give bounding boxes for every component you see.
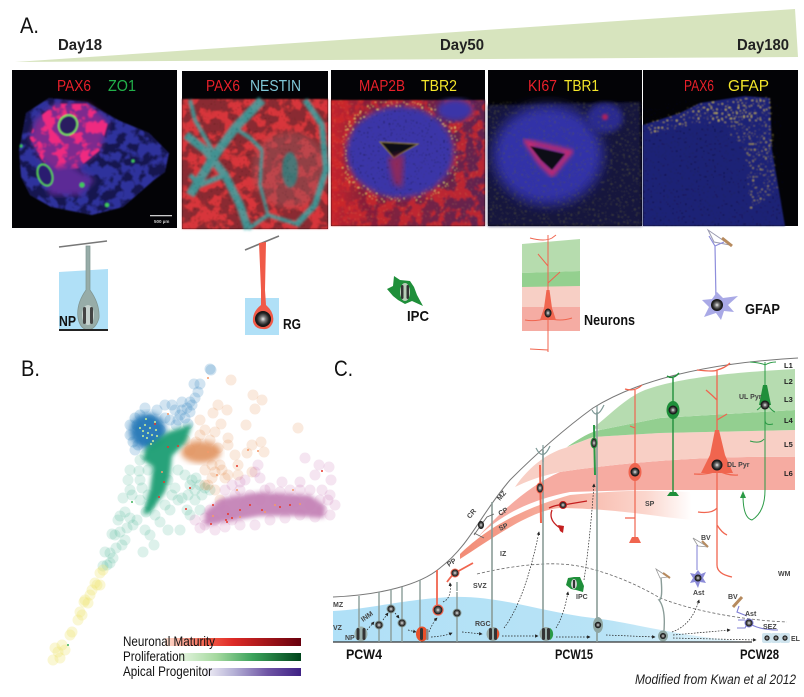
yellow cluster xyxy=(48,564,108,666)
label PCW4: PCW4 xyxy=(346,646,382,662)
label RG: RG xyxy=(283,316,301,333)
zone labels: VZ xyxy=(333,625,343,632)
micrograph: PAX6 NESTIN xyxy=(182,71,328,229)
zone labels: PP xyxy=(446,557,458,569)
zone labels: UL Pyr xyxy=(739,394,762,401)
legend label: neuronal maturity: Neuronal Maturity xyxy=(123,633,215,649)
label NP: NP xyxy=(59,313,76,330)
stain labels xyxy=(528,78,599,95)
zone labels: MZ xyxy=(496,489,508,502)
cell: neuroepithelial progenitors xyxy=(354,605,461,642)
micrograph: PAX6 GFAP xyxy=(643,70,798,226)
cell: deep layer pyramidal xyxy=(694,363,738,577)
zone labels: SP xyxy=(498,522,510,533)
legend bar: neuronal maturity xyxy=(165,638,301,646)
heading C: C. xyxy=(334,356,353,381)
cell: dividing red progenitor xyxy=(416,626,428,642)
layer labels xyxy=(784,361,794,478)
green core xyxy=(143,424,192,514)
panel B: cell scatter plot xyxy=(21,356,340,679)
layer labels: L4 xyxy=(784,416,794,425)
cell: migrating green neuron xyxy=(591,425,597,475)
marker dots: neuronal maturity xyxy=(154,423,323,525)
layer labels: L5 xyxy=(784,440,793,449)
purple cluster xyxy=(190,452,340,536)
stain labels: GFAP xyxy=(728,78,769,95)
orange core xyxy=(181,441,221,463)
zone labels: WM xyxy=(778,571,791,578)
cell: early neuron xyxy=(433,570,443,615)
cell type: GFAP astrocyte xyxy=(702,230,780,320)
stain labels: PAX6 xyxy=(684,78,714,95)
label PCW28: PCW28 xyxy=(740,646,779,662)
cell: red pyramidal 1 xyxy=(625,385,642,543)
zone labels: SEZ xyxy=(763,624,777,631)
zone labels: Ast xyxy=(745,611,757,618)
layer labels: L6 xyxy=(784,469,793,478)
label GFAP: GFAP xyxy=(745,301,780,318)
zone labels xyxy=(333,394,801,643)
L4 band xyxy=(567,410,795,447)
zone labels: DL Pyr xyxy=(727,462,750,469)
cell: radial glia dividing xyxy=(486,617,668,642)
zone labels: MZ xyxy=(333,602,344,609)
stain labels xyxy=(206,78,301,95)
zone labels: RGC xyxy=(475,621,491,628)
zone labels: BV xyxy=(701,535,711,542)
cell type: NP xyxy=(59,241,108,330)
zone labels: BV xyxy=(728,594,738,601)
zone labels: CR xyxy=(466,508,478,520)
panel C: cortical development schematic xyxy=(333,356,801,687)
micrograph: MAP2B TBR2 xyxy=(331,70,485,226)
cell type: Neurons xyxy=(522,235,635,352)
zone labels: SP xyxy=(645,501,655,508)
L5 band xyxy=(515,430,795,487)
label PCW15: PCW15 xyxy=(555,646,593,662)
cell: astrocyte with blood vessel xyxy=(690,538,708,588)
stain labels xyxy=(359,78,457,95)
zone labels: SVZ xyxy=(473,583,487,590)
stain labels xyxy=(57,78,136,95)
cell: preplate neuron xyxy=(447,563,473,582)
stain labels: KI67 xyxy=(528,78,557,95)
cell: migrating glia with vessel xyxy=(656,569,670,578)
heading A: A. xyxy=(20,13,39,38)
legend label: apical progenitor: Apical Progenitor xyxy=(123,663,212,679)
cell type: IPC xyxy=(387,276,429,325)
glia end-feet xyxy=(536,405,604,462)
label Neurons: Neurons xyxy=(584,312,635,329)
panel A: organoid timeline xyxy=(12,9,798,352)
L2-L3 band xyxy=(593,369,795,430)
zone labels: Ast xyxy=(693,590,705,597)
zone labels: INM xyxy=(360,610,375,624)
cell: subplate red neuron xyxy=(549,501,587,533)
stain labels: PAX6 xyxy=(206,78,240,95)
label IPC: IPC xyxy=(407,308,429,325)
ependymal cells xyxy=(762,633,790,643)
label Day180: Day180 xyxy=(737,37,789,54)
cell: green pyramidal xyxy=(666,373,680,496)
layer bands xyxy=(460,369,795,559)
stain labels: TBR2 xyxy=(421,78,457,95)
ventricular zone xyxy=(333,597,752,642)
pial surface xyxy=(333,358,798,597)
zone labels: NP xyxy=(345,635,355,642)
layer labels: L3 xyxy=(784,395,793,404)
stain labels: MAP2B xyxy=(359,78,405,95)
stain labels: NESTIN xyxy=(250,78,301,95)
migration dashed border xyxy=(477,564,787,622)
stain labels xyxy=(684,78,769,95)
scale bar: 500 µm xyxy=(154,219,169,224)
orange cluster xyxy=(180,374,304,506)
legend bar: proliferation xyxy=(180,653,301,661)
label Day50: Day50 xyxy=(440,37,484,54)
time wedge xyxy=(15,9,798,62)
blue core xyxy=(130,413,166,449)
stain labels: PAX6 xyxy=(57,78,91,95)
L6 band xyxy=(477,457,795,538)
cell: IPC xyxy=(566,577,584,592)
stain labels: TBR1 xyxy=(564,78,599,95)
purple core xyxy=(205,492,325,526)
SP band xyxy=(460,491,692,559)
cell: astrocyte 2 and blood vessel xyxy=(733,597,778,630)
cell: Cajal-Retzius xyxy=(474,514,494,538)
zone labels: IPC xyxy=(576,594,588,601)
legend bar: apical progenitor xyxy=(205,668,301,676)
layer labels: L2 xyxy=(784,377,793,386)
zone labels: IZ xyxy=(500,551,507,558)
radial glia processes xyxy=(359,412,664,642)
legend xyxy=(123,633,301,679)
light green cluster xyxy=(98,450,216,572)
zone labels: CP xyxy=(498,507,510,518)
ventricular baseline xyxy=(333,641,752,643)
scale bar xyxy=(150,215,172,224)
zone labels: EL xyxy=(791,636,801,643)
cell type: RG xyxy=(245,236,301,335)
micrograph: PAX6 ZO1 xyxy=(12,70,177,228)
marker dots: green on blue core xyxy=(139,418,158,445)
stain labels: ZO1 xyxy=(108,78,136,95)
legend label: proliferation: Proliferation xyxy=(123,648,185,664)
cell: migrating red neuron xyxy=(536,465,544,523)
micrograph: KI67 TBR1 xyxy=(488,70,642,226)
layer labels: L1 xyxy=(784,361,793,370)
blue cluster xyxy=(124,364,216,456)
lineage arrows xyxy=(367,484,756,640)
label Day18: Day18 xyxy=(58,37,102,54)
cell: upper layer pyramidal xyxy=(740,362,776,520)
heading B: B. xyxy=(21,356,40,381)
